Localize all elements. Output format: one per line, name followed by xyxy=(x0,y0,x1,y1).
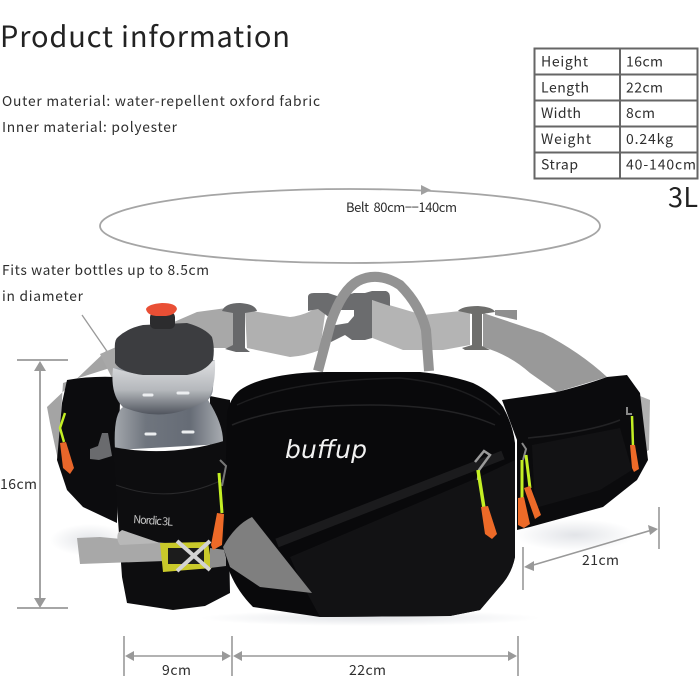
bottle note: Fits water bottles up to 8.5cm xyxy=(2,259,209,279)
specification table: Width xyxy=(541,103,581,123)
specification table xyxy=(534,48,698,178)
compression strap xyxy=(77,530,226,572)
ground shadows xyxy=(50,519,635,626)
specification table: Height xyxy=(541,52,589,72)
left zipper pull xyxy=(60,413,74,474)
specification table: 0.24kg xyxy=(626,129,673,149)
rear bottle sleeve xyxy=(210,396,230,445)
belt slider left xyxy=(222,303,257,352)
specification table: 22cm xyxy=(626,78,663,98)
specification table: Weight xyxy=(541,129,592,149)
capacity label: 3L xyxy=(668,176,698,215)
width dimension: 21cm xyxy=(582,550,619,570)
material text: Inner material: polyester xyxy=(2,116,178,136)
height dimension: 16cm xyxy=(0,474,37,494)
width dimension xyxy=(523,507,659,590)
bottle cap xyxy=(146,303,177,316)
diagonal zipper xyxy=(277,455,503,543)
side zipper pulls xyxy=(518,443,541,528)
waist belt xyxy=(47,291,650,460)
material text xyxy=(2,90,320,136)
bottom dimensions: 22cm xyxy=(349,660,386,680)
buckle xyxy=(308,291,390,342)
bottle-pocket zipper pull xyxy=(211,460,226,550)
belt slider right xyxy=(458,306,495,350)
specification table: 8cm xyxy=(626,103,655,123)
belt length ellipse: Belt 80cm−−140cm xyxy=(346,197,457,216)
title: Product information xyxy=(0,14,290,56)
bottle pocket xyxy=(113,440,230,610)
right pocket xyxy=(502,375,648,530)
material text: Outer material: water-repellent oxford fabric xyxy=(2,90,320,110)
left pocket xyxy=(57,377,120,523)
bottle pocket: Nordic 3L xyxy=(133,511,174,530)
bottom dimensions xyxy=(124,636,518,680)
bottom dimensions: 9cm xyxy=(162,660,191,680)
right zipper pull xyxy=(627,407,639,472)
belt length ellipse xyxy=(100,185,600,263)
side toggle xyxy=(90,433,112,460)
front zipper pull xyxy=(475,451,497,539)
reflective panel xyxy=(223,517,312,593)
carry handle xyxy=(318,277,429,371)
specification table: 40-140cm xyxy=(626,154,696,174)
bottle note: in diameter xyxy=(2,285,84,305)
logo: buffup xyxy=(285,435,367,464)
main pack xyxy=(223,372,515,617)
specification table: 16cm xyxy=(626,52,663,72)
specification table: Length xyxy=(541,78,589,98)
specification table: Strap xyxy=(541,154,578,174)
height dimension xyxy=(0,360,68,608)
water bottle xyxy=(112,303,223,450)
bottle note xyxy=(2,259,209,392)
